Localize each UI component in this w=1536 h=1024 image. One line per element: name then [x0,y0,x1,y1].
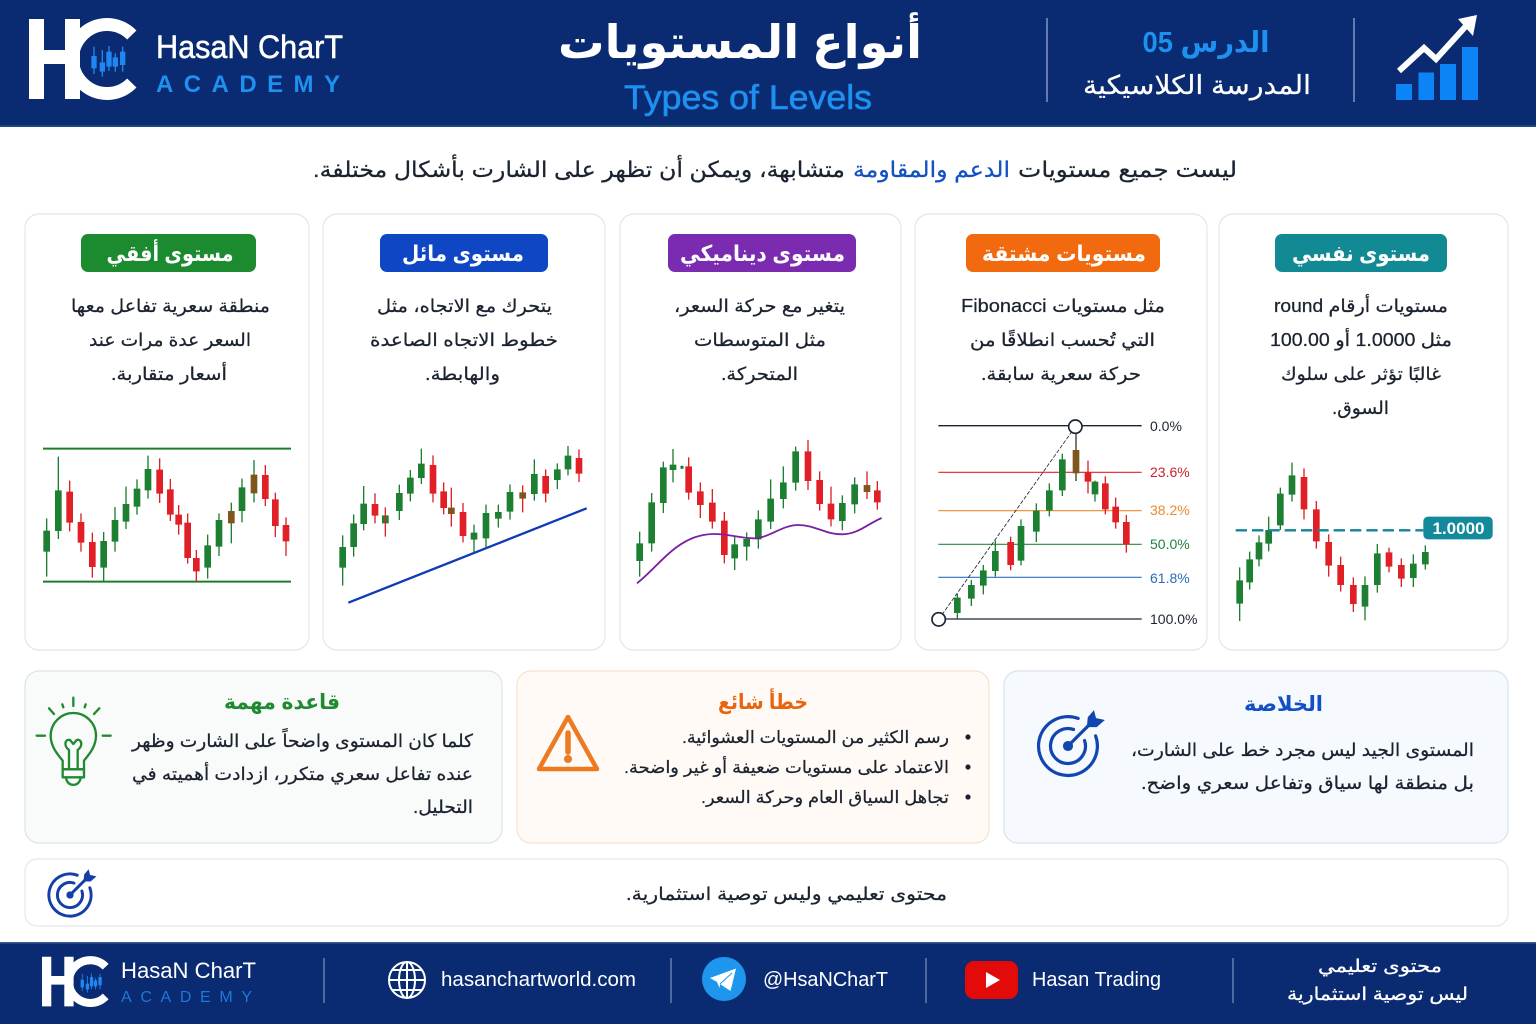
text: important rule: عنده تفاعل سعري متكرر، ازدادت أهميته في [132,762,473,785]
description: dynamic [674,296,845,385]
youtube: Hasan Trading [1032,969,1161,991]
intro sentence [313,154,1237,183]
header band [0,0,1536,127]
logo: HasaN CharT Academy: HasaN CharT [156,29,343,65]
heading: important rule: قاعدة مهمة [224,691,340,714]
website [389,962,636,998]
telegram [702,957,888,1001]
description: horizontal: أسعار متقاربة. [111,362,227,384]
chart: fibonacci retracement [932,418,1197,627]
lesson number: الدرس 05 [1142,27,1270,59]
text: summary: المستوى الجيد ليس مجرد خط على الشارت، [1131,740,1474,761]
footer note: محتوى تعليمي [1318,956,1442,977]
title: أنواع المستويات [558,12,922,69]
chart: fibonacci retracement: 0.0% [1150,418,1182,434]
pill: horizontal: مستوى أفقي [106,238,234,267]
panel: common mistake [517,671,989,843]
icon: target small [49,870,96,916]
pill: sloped: مستوى مائل [402,241,524,267]
chart: round number level: 1.0000 [1432,519,1484,538]
description: dynamic: يتغير مع حركة السعر، [674,296,845,317]
description: psychological [1270,294,1452,419]
icon: growth chart [1396,15,1478,100]
description: psychological: مستويات أرقام round [1274,294,1448,317]
intro sentence: ليست جميع مستويات [1018,157,1237,182]
icon: target [1039,711,1104,775]
pill: sloped [380,234,548,272]
list: common mistakes [624,728,971,807]
icon: light bulb [37,698,111,785]
pill: dynamic: مستوى ديناميكي [680,241,845,267]
panel: derived levels [915,214,1207,650]
chart: fibonacci retracement: 100.0% [1150,611,1197,627]
text: important rule [131,728,473,817]
intro sentence: متشابهة، ويمكن أن تظهر على الشارت بأشكال مختلفة. [313,154,845,182]
disclaimer text: محتوى تعليمي وليس توصية استثمارية. [626,884,947,905]
description: dynamic: المتحركة. [721,364,798,385]
list: common mistakes: الاعتماد على مستويات ضعيفة أو غير واضحة. [624,756,949,777]
icon: warning triangle [539,717,597,769]
description: psychological: السوق. [1332,398,1389,419]
list: common mistakes: تجاهل السياق العام وحركة السعر. [701,788,949,807]
footer logo: ACADEMY [121,989,252,1006]
description: derived: مثل مستويات Fibonacci [961,296,1165,317]
heading: common mistake: خطأ شائع [718,687,808,714]
chart: fibonacci retracement: 23.6% [1150,464,1190,480]
description: horizontal [71,296,270,384]
panel: summary [1004,671,1508,843]
footer logo: HasaN CharT [121,958,256,983]
chart: fibonacci retracement: 61.8% [1150,570,1190,586]
title: Types of Levels [624,79,872,117]
chart: round number level [1236,463,1493,621]
chart: horizontal range [43,449,291,582]
description: sloped [370,296,558,385]
description: psychological: مثل 1.0000 أو 100.00 [1270,328,1452,351]
lesson number: المدرسة الكلاسيكية [1083,70,1311,100]
youtube [965,961,1161,999]
pill: derived: مستويات مشتقة [982,241,1146,267]
text: important rule: كلما كان المستوى واضحاً على الشارت وظهر [131,728,473,752]
pill: psychological: مستوى نفسي [1292,241,1430,267]
chart: fibonacci retracement: 50.0% [1150,536,1190,552]
panel: dynamic level [620,214,901,650]
panel: sloped level [323,214,605,650]
footer band [0,942,1536,1024]
description: psychological: غالبًا تؤثر على سلوك [1281,364,1441,385]
text: summary [1131,740,1474,794]
logo: HasaN CharT Academy [29,19,343,99]
lesson number [1083,27,1311,100]
description: sloped: والهابطة. [425,364,500,385]
pill: dynamic [668,234,856,272]
telegram: @HsaNCharT [763,969,888,991]
website: hasanchartworld.com [441,969,636,991]
text: summary: بل منطقة لها سياق وتفاعل سعري واضح. [1141,773,1474,794]
footer note: ليس توصية استثمارية [1287,984,1468,1005]
chart: moving average [637,440,882,583]
disclaimer bar [25,859,1508,926]
description: horizontal: السعر عدة مرات عند [89,330,251,351]
logo: HasaN CharT Academy: ACADEMY [156,71,340,98]
footer note [1287,956,1468,1005]
panel: psychological level [1219,214,1508,650]
header separators [1047,18,1354,102]
description: sloped: يتحرك مع الاتجاه، مثل [377,296,552,317]
pill: horizontal [81,234,256,272]
intro sentence: الدعم والمقاومة [853,157,1010,183]
text: important rule: التحليل. [413,797,473,817]
title [558,12,922,117]
description: derived [961,296,1165,385]
description: derived: التي تُحسب انطلاقًا من [970,330,1155,351]
description: derived: حركة سعرية سابقة. [981,364,1141,385]
description: horizontal: منطقة سعرية تفاعل معها [71,296,270,317]
pill: psychological [1275,234,1447,272]
description: dynamic: مثل المتوسطات [694,330,826,351]
panel: important rule [25,671,502,843]
list: common mistakes: رسم الكثير من المستويات العشوائية. [682,728,949,748]
footer separators [324,958,1233,1003]
heading: summary: الخلاصة [1244,693,1323,716]
panel: horizontal level [25,214,309,650]
description: sloped: خطوط الاتجاه الصاعدة [370,330,558,351]
chart: ascending trendline [343,446,587,603]
footer logo [42,957,256,1006]
pill: derived [966,234,1160,272]
chart: fibonacci retracement: 38.2% [1150,502,1190,518]
